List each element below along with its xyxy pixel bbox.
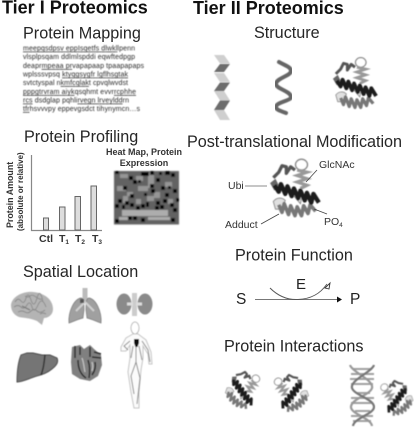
icon: heart (71, 345, 102, 381)
heat map grid (114, 171, 179, 224)
icon: lungs (69, 288, 101, 323)
enzyme arc (270, 283, 330, 300)
diagram: protein-protein interaction (220, 364, 314, 415)
protein sequence text block: vlsplpsqam ddlmlspddi eqwftedpgp (23, 54, 135, 61)
protein sequence text block: svtctyspal nkmfcqlakt cpvqlwvdst (23, 80, 128, 87)
diagram: enzyme reaction (236, 276, 360, 308)
reaction arrow (255, 296, 342, 302)
protein sequence text block: tfrhsvvvpy eppevgsdct tihynymcn…s (23, 106, 140, 113)
bar labels: T (75, 233, 81, 245)
bar labels: 2 (81, 239, 85, 246)
heading: Protein Interactions: Protein Interactions (224, 338, 363, 356)
enzyme E: E (296, 276, 306, 293)
diagram: modified protein (225, 159, 355, 231)
protein sequence text block: deaprmpeaa prvapapaap tpaapapaps (23, 63, 144, 70)
label: PO4: 4 (339, 222, 343, 229)
axes (32, 155, 102, 230)
label: PO4 (314, 209, 343, 229)
heading: Protein Function: Protein Function (235, 246, 353, 264)
protein three, bound to DNA (374, 373, 414, 419)
label: GlcNAc: GlcNAc (319, 159, 355, 171)
substrate S: S (236, 291, 246, 308)
icon: DNA double helix (350, 365, 374, 426)
bar labels: T (59, 233, 65, 245)
bar labels: T (92, 233, 98, 245)
icon: alpha helix (276, 62, 291, 113)
label: PO4: PO (324, 216, 339, 228)
heat map: protein expression (106, 147, 182, 224)
label: Adduct: Adduct (225, 219, 258, 231)
icon: beta sheet (214, 55, 230, 120)
heading: Post-translational Modification: Post-translational Modification (187, 133, 402, 151)
protein one (220, 364, 267, 412)
icon: folded protein (333, 58, 376, 107)
heading: Spatial Location: Spatial Location (23, 263, 138, 281)
icon: kidneys (116, 293, 152, 316)
bar chart: protein amount (5, 152, 102, 246)
heat map title: Heat Map, Protein (106, 147, 182, 157)
bar labels: 3 (98, 239, 102, 246)
product P: P (350, 291, 360, 308)
protein sequence text block: pppgtrvram aiykqsqhmt evvrrcphhe (23, 89, 136, 96)
y axis label: Protein Amount (5, 162, 15, 228)
icon: brain (11, 292, 53, 325)
heading: Structure: Structure (254, 24, 320, 42)
bars (44, 186, 96, 230)
icon: liver (17, 353, 58, 382)
heat map title (106, 147, 182, 168)
heading: Protein Mapping: Protein Mapping (23, 24, 141, 42)
y axis label (5, 152, 25, 231)
protein (270, 159, 319, 216)
y axis label: (absolute or relative) (16, 152, 25, 231)
protein two (267, 367, 314, 415)
protein sequence text block: wplsssvpsq ktyqgsygfr lgflhsgtak (22, 72, 128, 78)
heat map title: Expression (120, 158, 168, 168)
icon: human circulatory system (121, 322, 152, 408)
bar labels (39, 233, 102, 246)
bar labels: Ctl (39, 233, 53, 245)
label: Ubi: Ubi (228, 180, 244, 192)
bar labels: 1 (65, 239, 69, 246)
protein sequence text block (22, 46, 144, 113)
protein sequence text block: meepqsdpsv eppIsqetfs dlwkllpenn (23, 46, 135, 52)
heading: Protein Profiling: Protein Profiling (24, 128, 138, 146)
protein sequence text block: rcs dsdglap pqhlirvegn lrveylddrn (23, 98, 129, 104)
